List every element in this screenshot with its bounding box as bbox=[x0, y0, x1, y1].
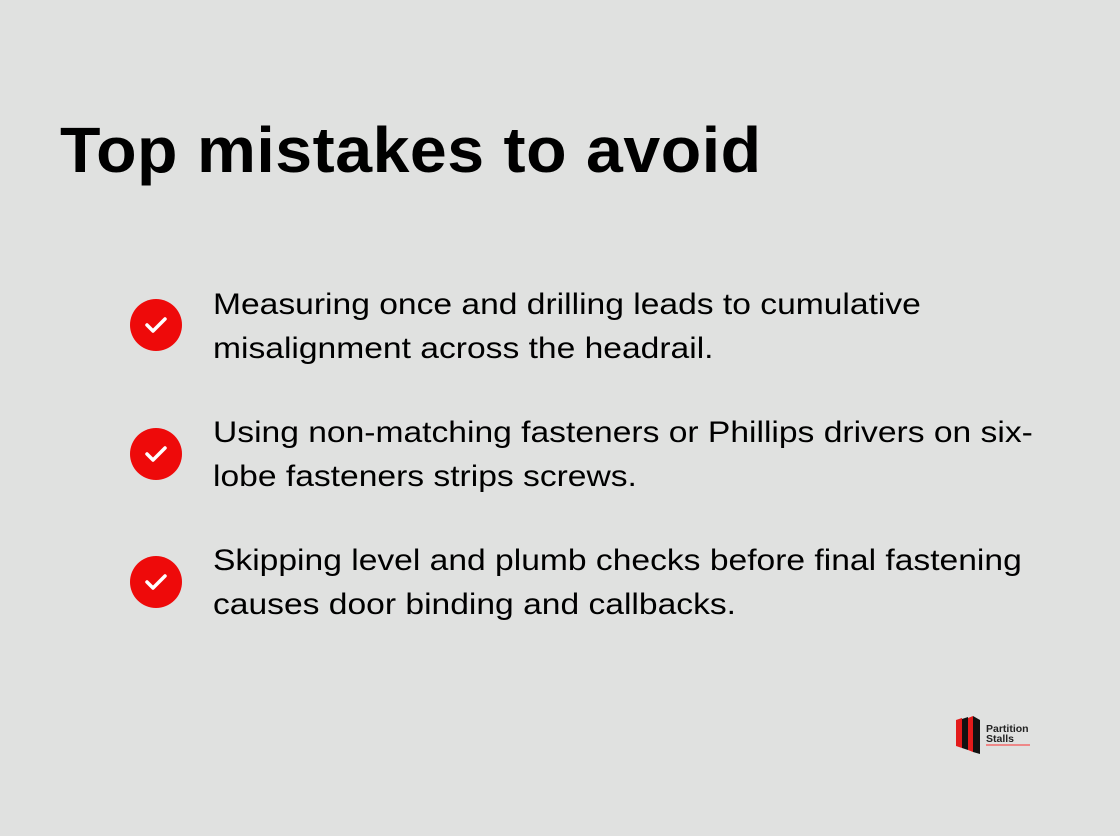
title: Top mistakes to avoid bbox=[60, 114, 762, 186]
text 2 bbox=[213, 416, 1033, 493]
item 2 bbox=[130, 416, 1033, 493]
item 3 bbox=[130, 544, 1022, 621]
text 2: lobe fasteners strips screws. bbox=[213, 460, 637, 493]
logo: Stalls bbox=[986, 733, 1014, 745]
text 1: Measuring once and drilling leads to cumulative bbox=[213, 288, 921, 321]
item 1 bbox=[130, 288, 921, 365]
text 2: Using non-matching fasteners or Phillips drivers on six- bbox=[213, 416, 1033, 449]
icon: check 3 bbox=[130, 556, 182, 608]
icon: check 1 bbox=[130, 299, 182, 351]
text 3: causes door binding and callbacks. bbox=[213, 588, 736, 621]
text 3: Skipping level and plumb checks before final fastening bbox=[213, 544, 1022, 577]
text 1: misalignment across the headrail. bbox=[213, 332, 714, 365]
logo bbox=[956, 716, 1030, 754]
text 1 bbox=[213, 288, 921, 365]
icon: check 2 bbox=[130, 428, 182, 480]
logo: Partition bbox=[986, 723, 1029, 735]
text 3 bbox=[213, 544, 1022, 621]
